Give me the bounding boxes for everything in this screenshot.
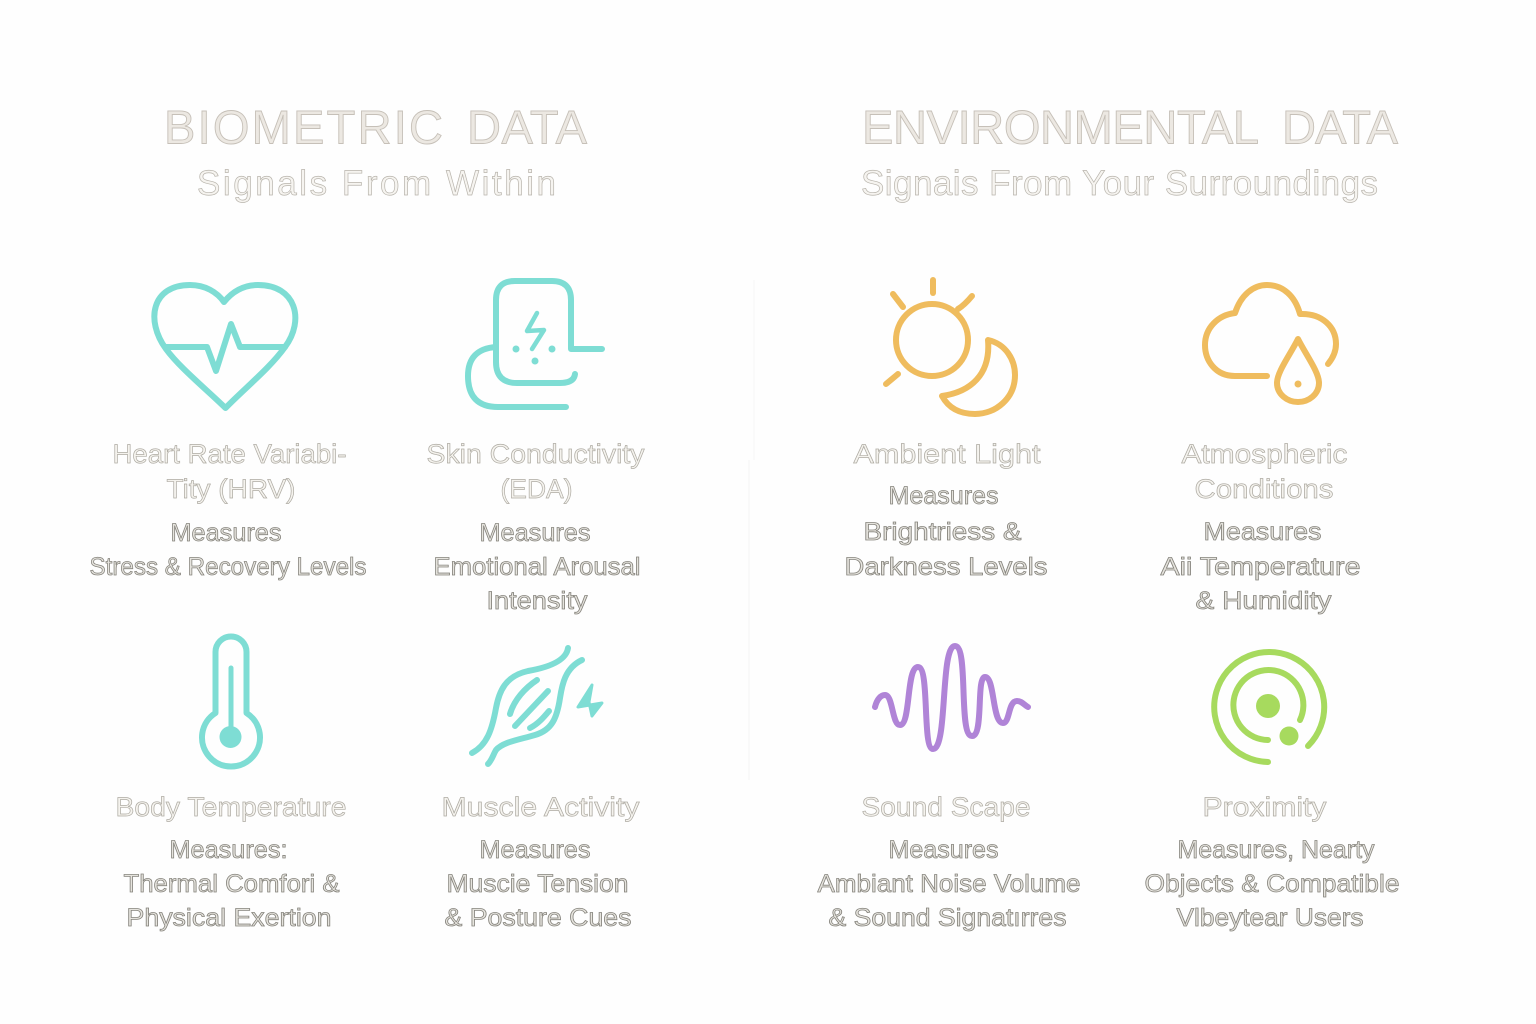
text: atmospheric conditions description: Measures [1204, 518, 1322, 546]
icon: thermometer [202, 636, 260, 767]
text: skin conductivity description: Measures [480, 519, 590, 547]
text: ambient light description: Ambient Light [854, 439, 1041, 469]
text: muscle activity description: Muscie Tension [446, 870, 628, 898]
text: skin conductivity description [426, 439, 645, 615]
text: atmospheric conditions description: Atmospheric [1182, 439, 1348, 469]
text: heart rate variability description: Heart Rate Variabi- [112, 439, 346, 469]
text: ambient light description: Measures [888, 482, 998, 510]
text: proximity description: Vlbeytear Users [1176, 904, 1364, 932]
card: ambient light [844, 280, 1048, 581]
icon: sound wave [875, 646, 1028, 749]
heading: biometric data [164, 100, 588, 203]
text: skin conductivity description: Intensity [486, 587, 588, 615]
text: atmospheric conditions description [1160, 439, 1360, 615]
text: heart rate variability description: Stress & Recovery Levels [90, 553, 366, 581]
text: sound scape description: & Sound Signatırres [828, 904, 1066, 932]
text: skin conductivity description: Skin Conductivity [426, 439, 645, 469]
heading: environmental data: DATA [1282, 100, 1399, 154]
text: proximity description: Objects & Compatible [1144, 870, 1400, 898]
text: ambient light description: Darkness Levels [844, 553, 1048, 581]
card: body temperature [116, 636, 346, 932]
card: atmospheric conditions [1160, 285, 1360, 615]
card: muscle activity [442, 648, 640, 932]
heading: environmental data: Signais From Your Surroundings [861, 164, 1378, 203]
text: heart rate variability description: Tity (HRV) [166, 474, 296, 504]
card: proximity [1144, 652, 1400, 932]
icon: skin sensor with spark [468, 281, 602, 407]
card: skin conductivity [426, 281, 645, 615]
text: body temperature description [116, 792, 346, 932]
card: heart rate variability [90, 285, 366, 581]
text: muscle activity description: & Posture Cues [444, 904, 632, 932]
text: atmospheric conditions description: Conditions [1194, 474, 1334, 504]
heading: biometric data: BIOMETRIC [164, 100, 443, 154]
icon: proximity rings [1214, 652, 1324, 762]
text: body temperature description: Thermal Comfori & [124, 870, 340, 898]
text: atmospheric conditions description: Aii Temperature [1160, 553, 1360, 581]
icon: sun and moon [886, 280, 1015, 414]
text: skin conductivity description: Emotional Arousal [434, 553, 640, 581]
panel: environmental data [818, 100, 1400, 932]
text: muscle activity description: Measures [480, 836, 590, 864]
card: sound scape [818, 646, 1080, 932]
heading: biometric data: DATA [467, 100, 588, 154]
text: proximity description: Proximity [1202, 792, 1327, 822]
panel: biometric data [90, 100, 645, 932]
icon: cloud with droplet [1205, 285, 1336, 402]
text: body temperature description: Measures: [170, 836, 288, 864]
text: ambient light description [844, 439, 1048, 581]
text: heart rate variability description: Measures [170, 519, 282, 547]
text: ambient light description: Brightriess & [864, 518, 1022, 546]
text: sound scape description: Measures [888, 836, 998, 864]
text: heart rate variability description [90, 439, 366, 581]
text: sound scape description: Sound Scape [862, 792, 1030, 822]
text: sound scape description: Ambiant Noise Volume [818, 870, 1080, 898]
text: proximity description: Measures, Nearty [1178, 836, 1375, 864]
text: proximity description [1144, 792, 1400, 932]
text: muscle activity description [442, 792, 640, 932]
heading: environmental data: ENVIRONMENTAL [862, 100, 1259, 154]
icon: heart with pulse [154, 285, 295, 408]
text: skin conductivity description: (EDA) [500, 474, 572, 504]
text: sound scape description [818, 792, 1080, 932]
heading: biometric data: Signals From Within [197, 164, 556, 203]
text: atmospheric conditions description: & Humidity [1196, 587, 1332, 615]
text: muscle activity description: Muscle Activity [442, 792, 640, 822]
text: body temperature description: Physical Exertion [126, 904, 332, 932]
heading: environmental data [861, 100, 1399, 203]
icon: muscle fibres with spark [472, 648, 602, 764]
text: body temperature description: Body Temperature [116, 792, 346, 822]
